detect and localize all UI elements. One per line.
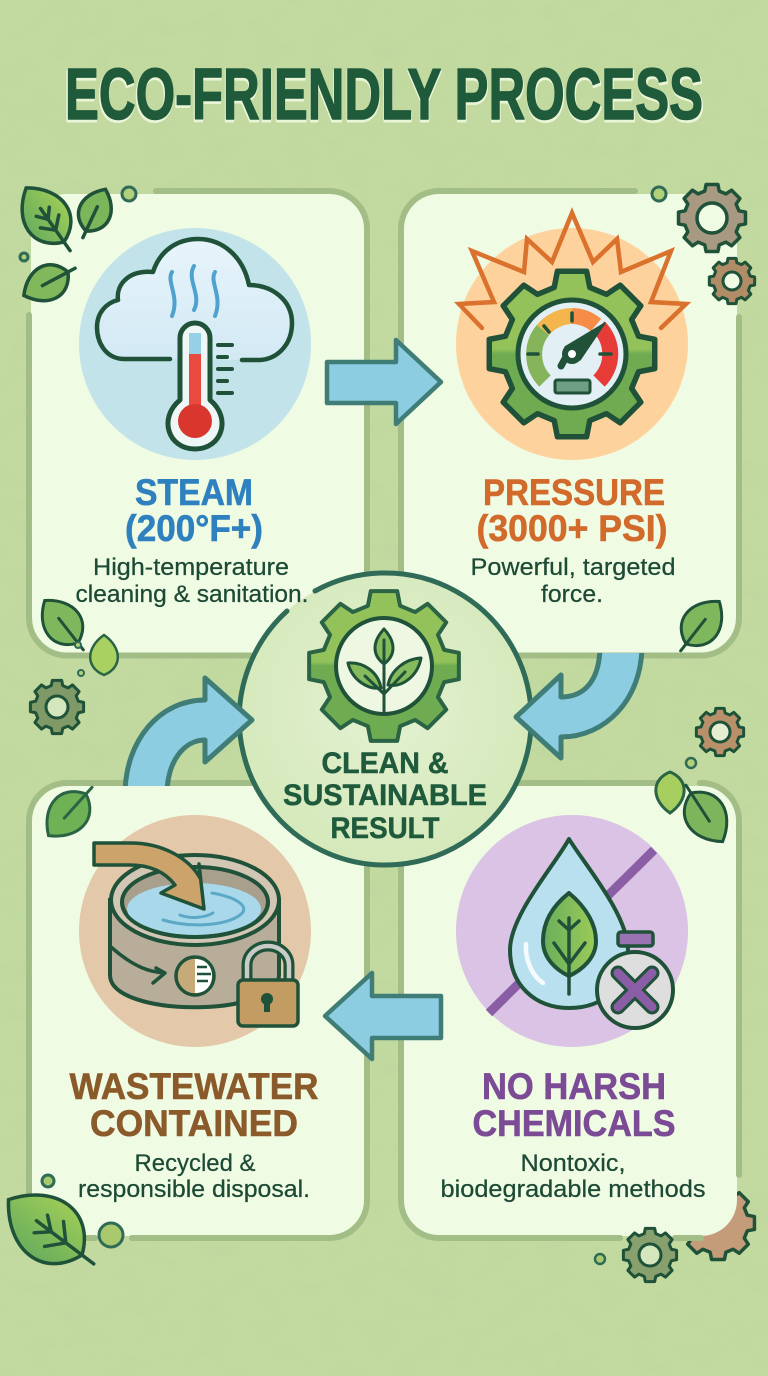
leaves: top left cluster [7, 175, 120, 311]
chemicals description [440, 1150, 706, 1203]
steam description: High-temperature [93, 554, 289, 581]
result label: CLEAN & [322, 747, 448, 780]
gear: mid left [30, 680, 84, 734]
pressure heading: PRESSURE [483, 472, 665, 513]
icon: gear gauge with burst [456, 213, 688, 460]
dot: right [686, 758, 696, 768]
dot: top right [652, 187, 666, 201]
curved arrow: wastewater to result [125, 678, 252, 795]
panel: steam [29, 191, 367, 656]
chemicals description: biodegradable methods [440, 1176, 706, 1203]
gears: top right [679, 185, 755, 304]
dots: top left [20, 187, 136, 261]
leaves: mid left [30, 589, 118, 675]
curved arrow: pressure to result [516, 645, 642, 758]
chemicals heading: NO HARSH [482, 1066, 666, 1107]
pressure rating: (3000+ PSI) [476, 508, 668, 549]
wastewater description: Recycled & [134, 1150, 256, 1177]
dots: bottom left [42, 1175, 123, 1247]
chemicals heading [472, 1066, 676, 1144]
leaf: mid right [666, 590, 734, 662]
panel: no harsh chemicals [401, 783, 739, 1238]
pressure description [470, 554, 676, 608]
wastewater description [78, 1150, 310, 1203]
chemicals description: Nontoxic, [520, 1150, 626, 1177]
dots: mid left [75, 642, 84, 676]
icon: cloud and thermometer [79, 228, 311, 460]
icon: contained tank [79, 815, 311, 1047]
result label [283, 747, 487, 845]
icon: gear with sprout [309, 591, 459, 741]
wastewater heading: CONTAINED [90, 1103, 298, 1144]
result label: RESULT [330, 812, 440, 845]
gear: peeking behind lower right panel [682, 1187, 754, 1259]
result label: SUSTAINABLE [283, 779, 487, 812]
center hub: clean and sustainable result [238, 573, 531, 866]
leaf: wastewater panel corner [34, 774, 106, 849]
dot: bottom right [595, 1254, 605, 1264]
steam description: cleaning & sanitation. [76, 581, 308, 608]
steam heading: STEAM [135, 472, 253, 513]
icon: water drop, leaf and chemical flask [456, 815, 688, 1047]
panel: pressure [401, 191, 739, 656]
steam description [76, 554, 308, 608]
arrow: chemicals to wastewater [325, 973, 441, 1059]
pressure description: Powerful, targeted [470, 554, 676, 581]
arrow: steam to pressure [327, 340, 441, 424]
chemicals heading: CHEMICALS [472, 1103, 676, 1144]
gear: right [696, 708, 744, 756]
steam temperature: (200°F+) [125, 508, 263, 549]
wastewater heading [70, 1066, 318, 1144]
leaf: bottom left [0, 1174, 113, 1289]
wastewater heading: WASTEWATER [70, 1066, 318, 1107]
leaves: chemicals panel corner [656, 772, 739, 853]
gear: bottom right [623, 1228, 677, 1282]
wastewater description: responsible disposal. [78, 1176, 310, 1203]
panel: wastewater [29, 783, 367, 1238]
pressure description: force. [541, 581, 603, 608]
